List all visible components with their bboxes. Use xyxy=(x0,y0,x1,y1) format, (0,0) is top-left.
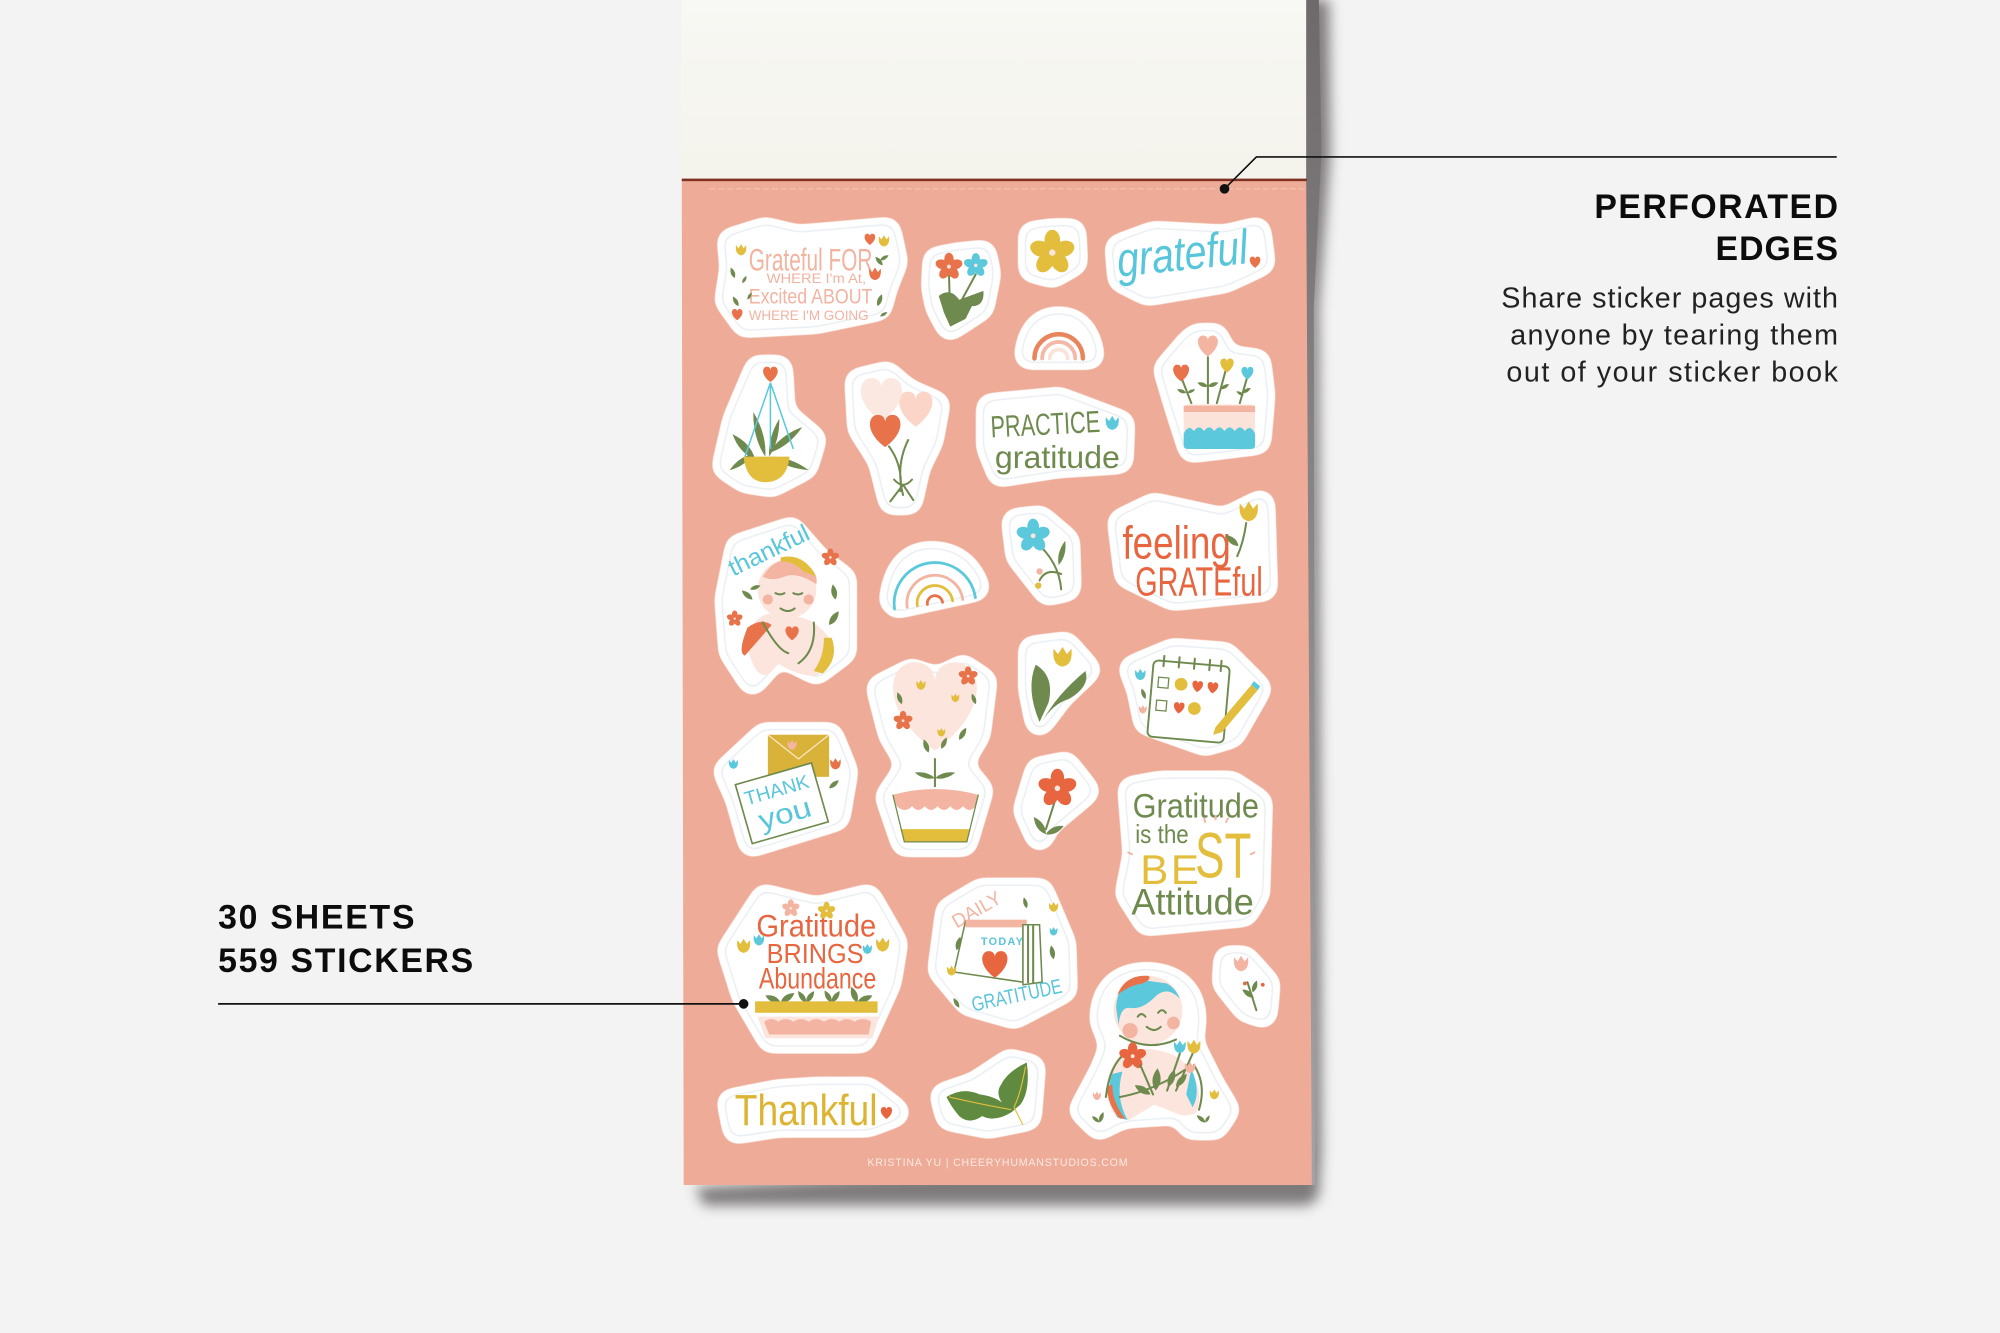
sticker: thank you card: you xyxy=(755,791,815,836)
sticker: gratitude is the best attitude: Attitude xyxy=(1131,882,1254,923)
callout text: perforated edges: anyone by tearing them xyxy=(1510,319,1838,351)
torn edge line xyxy=(682,179,1307,181)
sticker: feeling grateful xyxy=(1122,502,1263,605)
sticker: Grateful for where I'm at xyxy=(729,232,893,323)
sticker: daily gratitude xyxy=(943,888,1064,1016)
sticker: yellow flower xyxy=(1028,230,1076,276)
sticker: Thankful: Thankful xyxy=(735,1087,878,1135)
sticker: thankful person xyxy=(724,520,842,680)
pad shadow xyxy=(695,0,1330,1205)
sticker: practice gratitude xyxy=(990,402,1120,475)
sticker: daily gratitude: DAILY xyxy=(949,888,1006,933)
sticker: practice gratitude: PRACTICE xyxy=(990,405,1101,445)
sticker: hanging plant xyxy=(727,367,811,482)
sticker: flower pot with hearts xyxy=(1168,336,1260,449)
callout leader: sheet count xyxy=(218,999,748,1009)
callout text: sheet count: 30 SHEETS xyxy=(218,899,415,937)
credit line: KRISTINA YU | CHEERYHUMANSTUDIOS.COM xyxy=(867,1157,1128,1169)
sticker: gratitude brings abundance: BRINGS xyxy=(767,938,864,969)
sticker: Grateful for where I'm at: WHERE I'M GOING xyxy=(749,307,869,323)
sticker: gratitude is the best attitude: BE xyxy=(1140,846,1199,893)
sticker: gratitude is the best attitude: Gratitude xyxy=(1133,788,1259,826)
sticker: heart balloons xyxy=(860,376,935,501)
sticker: gratitude brings abundance: Gratitude xyxy=(756,907,876,943)
sticker: practice gratitude: gratitude xyxy=(995,439,1120,475)
sticker: thank you card xyxy=(728,735,843,844)
sticker: thankful person: thankful xyxy=(724,520,814,582)
sticker: gratitude is the best attitude: is the xyxy=(1135,821,1189,849)
sticker: green leaves xyxy=(945,1063,1031,1125)
callout text: perforated edges xyxy=(1501,188,1839,388)
sticker sheet xyxy=(682,179,1312,1185)
sticker: grateful: grateful xyxy=(1114,220,1251,288)
sticker: Grateful for where I'm at: Grateful FOR xyxy=(749,241,872,277)
sticker: orange and blue flowers xyxy=(934,253,989,327)
callout text: perforated edges: out of your sticker book xyxy=(1506,356,1839,388)
sticker: calendar with smileys xyxy=(1134,653,1260,743)
sticker: thank you card: THANK xyxy=(742,772,812,810)
sticker: person holding flowers xyxy=(1084,976,1224,1125)
sticker: daily gratitude: TODAY xyxy=(981,936,1024,948)
sticker: gratitude brings abundance xyxy=(732,899,893,1038)
sticker: gratitude brings abundance: Abundance xyxy=(759,963,876,996)
sticker: blue rainbow xyxy=(889,556,975,609)
sticker: red flower xyxy=(1028,767,1084,837)
sticker: blue flower xyxy=(1015,519,1068,591)
sticker: small pink tulip xyxy=(1227,956,1265,1013)
sticker: feeling grateful: GRATEful xyxy=(1135,559,1263,605)
sticker: gratitude is the best attitude: ST xyxy=(1195,820,1251,892)
sticker: orange rainbow xyxy=(1029,321,1089,358)
sticker: daily gratitude: GRATITUDE xyxy=(970,976,1064,1016)
callout text: perforated edges: EDGES xyxy=(1716,230,1838,268)
callout leader: perforated edges xyxy=(1220,157,1837,194)
sticker: Grateful for where I'm at: WHERE I'm At, xyxy=(767,270,866,286)
blank white page xyxy=(681,0,1306,179)
sticker: gratitude is the best attitude xyxy=(1128,786,1259,923)
sticker: heart plant in pot xyxy=(881,662,982,842)
sticker: yellow tulip with leaves xyxy=(1031,647,1086,722)
callout text: perforated edges: Share sticker pages with xyxy=(1501,282,1838,314)
callout text: perforated edges: PERFORATED xyxy=(1594,188,1838,226)
sticker: Grateful for where I'm at: Excited ABOUT xyxy=(749,284,872,309)
callout text: sheet count: 559 STICKERS xyxy=(218,942,473,980)
sticker: feeling grateful: feeling xyxy=(1122,517,1231,569)
callout text: sheet count xyxy=(218,899,473,980)
